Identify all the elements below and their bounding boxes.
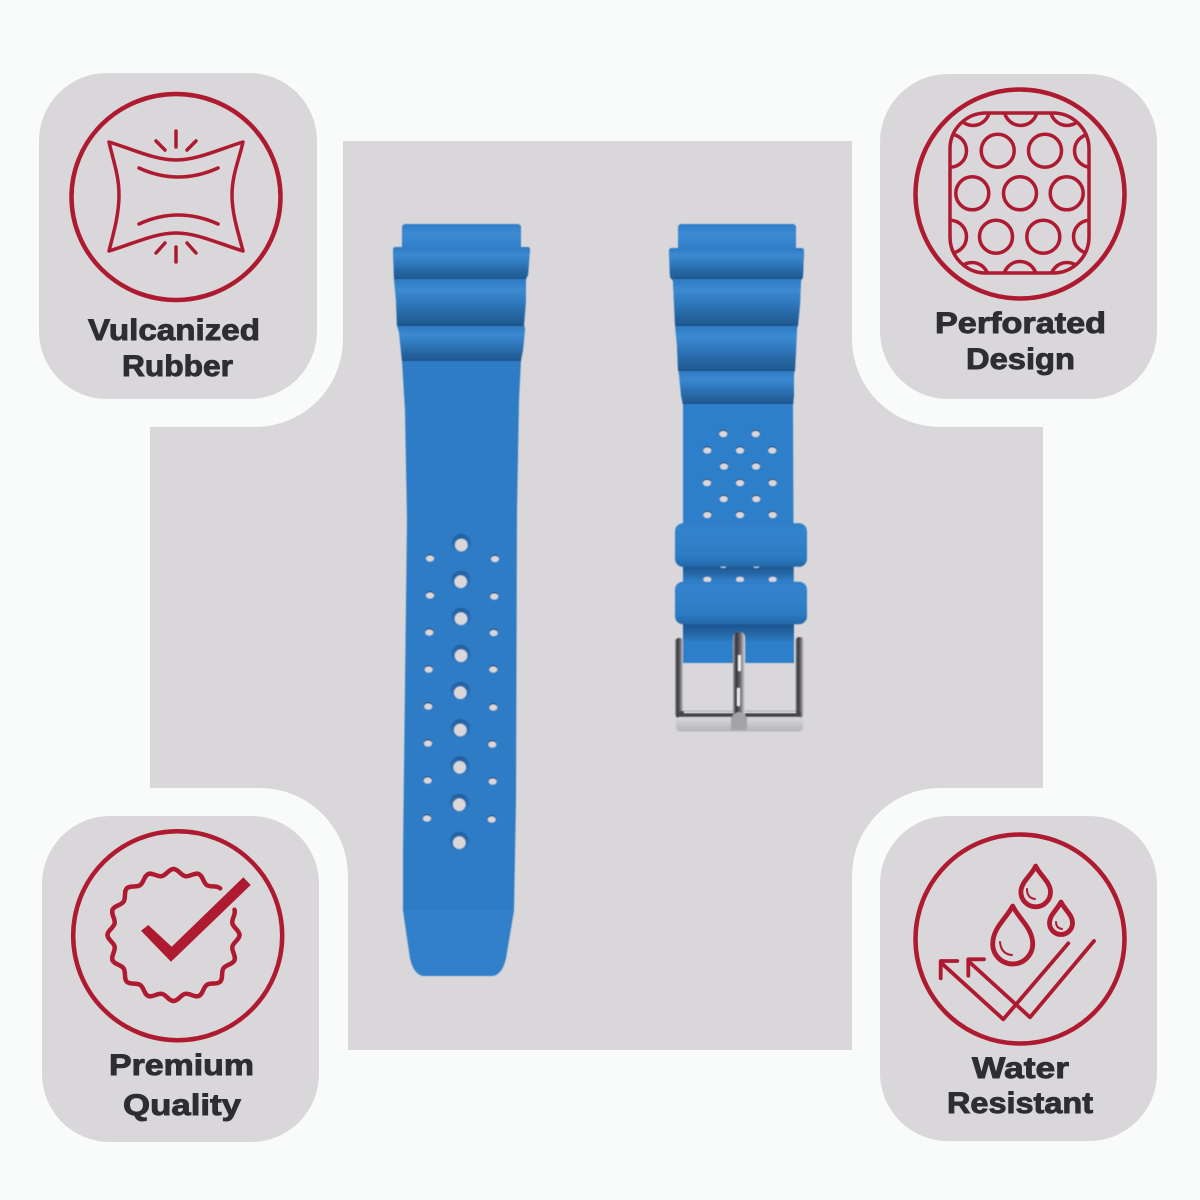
perforation holes: [703, 430, 777, 582]
label: perforated design: Design: [966, 343, 1075, 376]
panel: water resistant: [880, 816, 1157, 1141]
icon: perforated rounded square: [916, 90, 1124, 298]
label: premium quality: [109, 1049, 254, 1122]
label: premium quality: Premium: [109, 1049, 254, 1082]
label: water resistant: [947, 1052, 1093, 1120]
label: vulcanized rubber: [88, 314, 260, 383]
strap body with ribbed shoulder: [392, 223, 531, 977]
label: vulcanized rubber: Rubber: [122, 350, 233, 383]
keeper loops: [675, 523, 807, 624]
card background: [880, 74, 1157, 399]
small side holes: [423, 554, 499, 823]
card background: [42, 816, 319, 1142]
panel: short blue rubber strap with buckle: [665, 220, 810, 732]
label: premium quality: Quality: [123, 1089, 241, 1122]
panel: premium quality: [42, 816, 319, 1142]
card background: [880, 816, 1157, 1141]
label: vulcanized rubber: Vulcanized: [88, 314, 260, 347]
icon: stretched rubber pillow: [72, 94, 280, 300]
buckle tongue: [731, 632, 747, 730]
panel: vulcanized rubber: [39, 73, 317, 399]
label: perforated design: Perforated: [935, 307, 1106, 340]
large centre holes: [449, 534, 471, 852]
label: perforated design: [935, 307, 1106, 376]
central grey backdrop with notched corners: [150, 141, 1043, 1050]
card background: [39, 73, 317, 399]
icon: water drops and deflecting arrows: [916, 834, 1124, 1044]
label: water resistant: Resistant: [947, 1087, 1093, 1120]
label: water resistant: Water: [972, 1052, 1069, 1085]
panel: long blue rubber strap: [392, 223, 531, 977]
panel: perforated design: [880, 74, 1157, 399]
buckle frame: [675, 637, 804, 732]
icon: wavy seal with check mark: [73, 831, 282, 1040]
strap body with ribs: [665, 220, 810, 665]
